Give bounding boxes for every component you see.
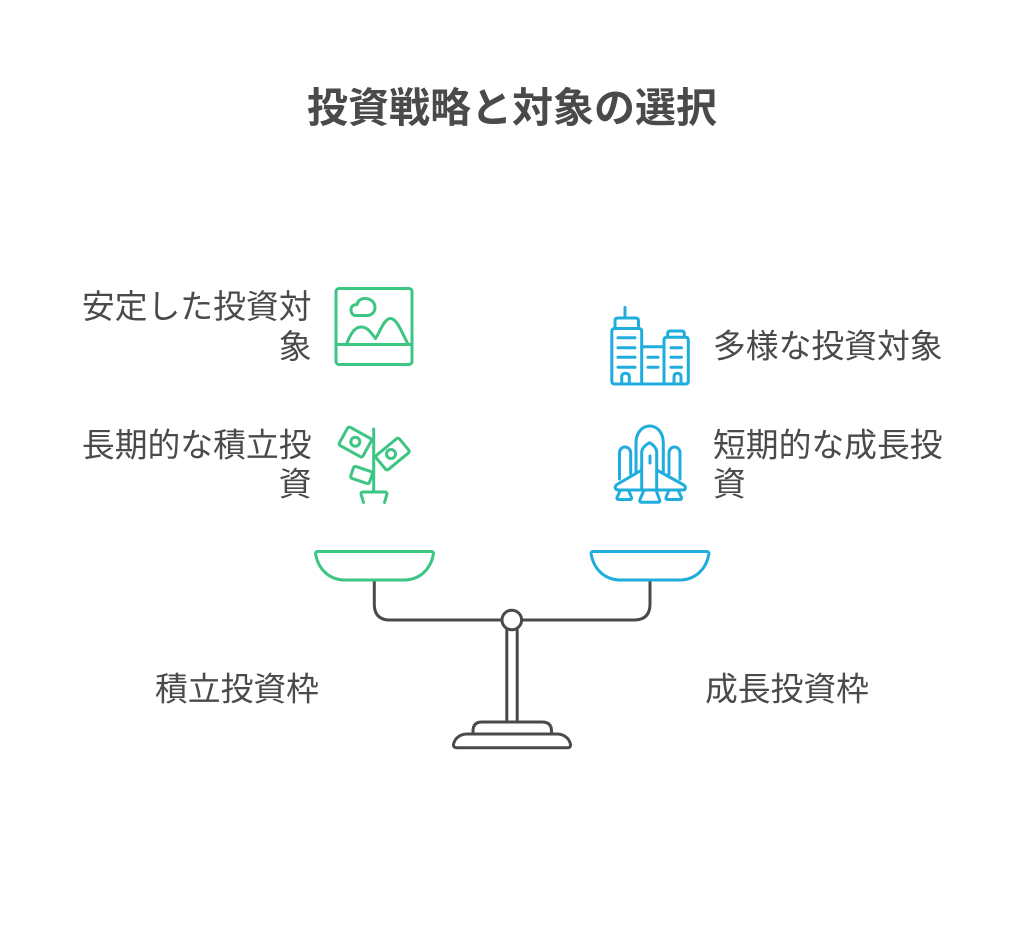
icon: money plant xyxy=(338,426,410,502)
label: accumulation quota: 積立投資枠 xyxy=(155,670,319,708)
text: stable investment targets: 象 xyxy=(279,328,312,365)
text: short-term growth xyxy=(713,426,943,502)
right pan xyxy=(591,552,709,580)
text: long-term accumulation: 資 xyxy=(279,466,312,502)
text: diverse investment targets: 多様な投資対象 xyxy=(713,328,943,364)
scale pivot xyxy=(502,610,522,630)
text: stable investment targets: 安定した投資対 xyxy=(82,288,312,325)
text: short-term growth: 短期的な成長投 xyxy=(713,426,943,464)
text: long-term accumulation: 長期的な積立投 xyxy=(82,426,312,464)
label: growth quota: 成長投資枠 xyxy=(705,670,869,708)
text: long-term accumulation xyxy=(82,426,312,502)
icon: landscape picture xyxy=(336,288,412,364)
scale beam xyxy=(374,581,650,620)
icon: city buildings xyxy=(612,308,688,384)
text: stable investment targets xyxy=(82,288,312,365)
icon: space shuttle xyxy=(615,426,686,502)
balance scale xyxy=(316,552,709,748)
title: 投資戦略と対象の選択 xyxy=(307,85,717,131)
text: short-term growth: 資 xyxy=(713,466,746,502)
left pan xyxy=(316,552,433,580)
scale post xyxy=(507,630,517,722)
scale base xyxy=(453,722,571,748)
